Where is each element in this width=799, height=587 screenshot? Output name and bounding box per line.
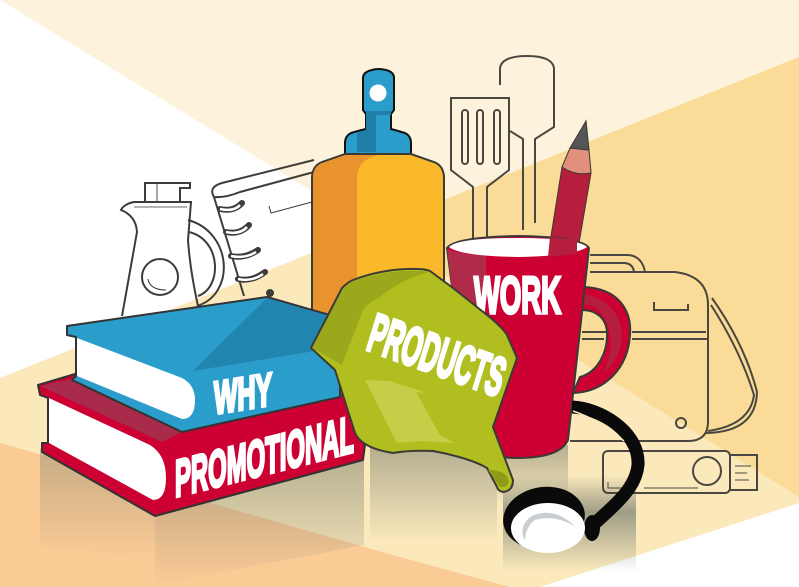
icon: green cap with PRODUCTS [311, 269, 517, 492]
icon: spoon outline [500, 56, 554, 230]
icon: green cap with PRODUCTS: PRODUCTS [361, 302, 513, 408]
book: red book with PROMOTIONAL [38, 374, 365, 516]
text: PROMOTIONAL [175, 405, 354, 509]
icon: jug outline [121, 183, 224, 316]
label: WORK: WORK [474, 267, 561, 325]
icon: spatula outline [451, 98, 509, 238]
icon: pencil [548, 121, 591, 255]
icon: lanyard with disc [499, 407, 638, 554]
icon: USB drive outline [603, 451, 757, 493]
label: WHY: WHY [214, 363, 272, 424]
book: blue book with WHY [67, 297, 340, 432]
shadows beneath the objects [40, 445, 636, 585]
icon: red mug [447, 236, 630, 458]
icon: bag outline [570, 255, 757, 441]
icon: spray bottle [312, 69, 444, 315]
icon: measuring cup outline [212, 160, 314, 296]
